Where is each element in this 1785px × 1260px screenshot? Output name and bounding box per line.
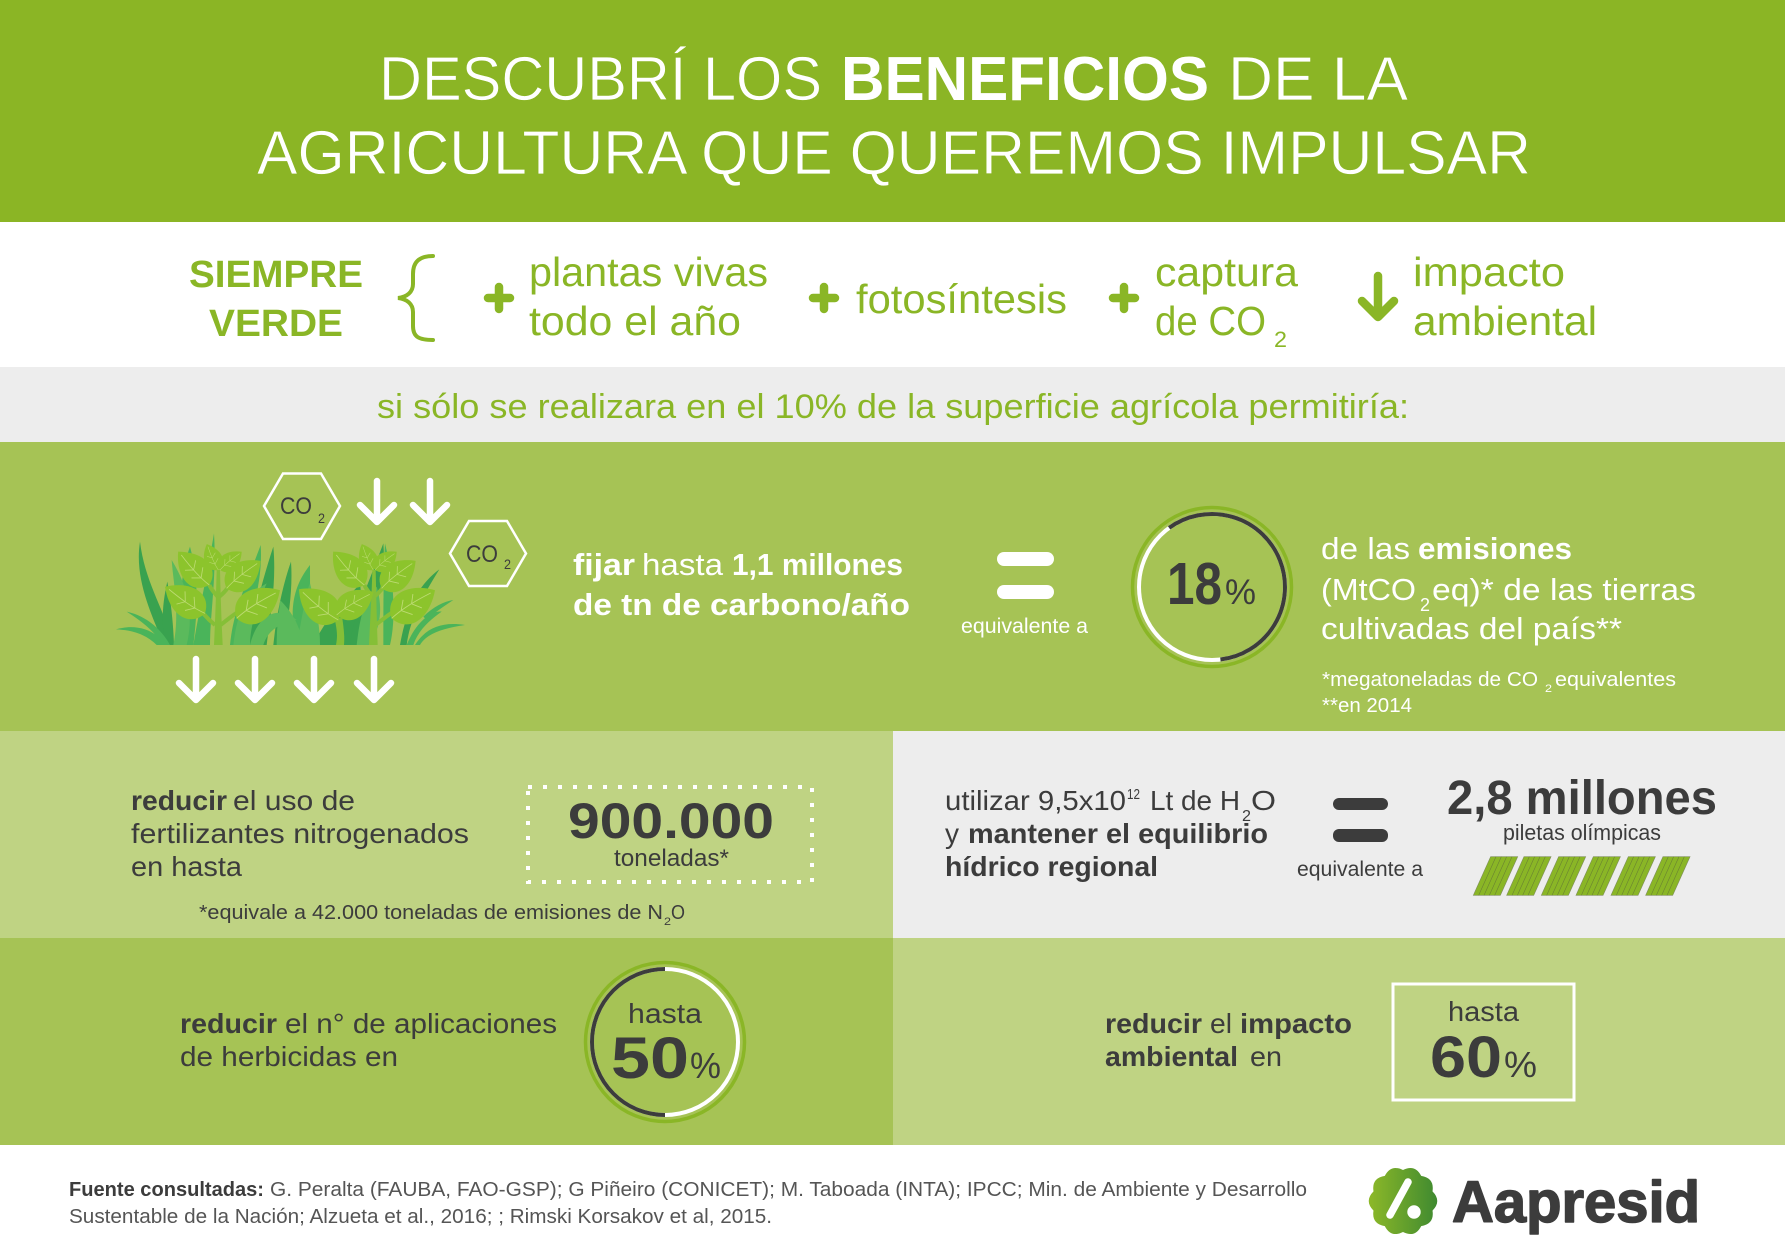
title: DE LA	[1228, 45, 1409, 114]
text: emisiones: emisiones	[1418, 531, 1572, 566]
footnote: N2O: O	[671, 902, 685, 924]
text: plantas vivas: todo el año	[529, 298, 741, 344]
text: captura de CO2: de CO	[1155, 298, 1266, 344]
panel: subtitle band	[0, 367, 1785, 442]
text: reducir impacto	[1105, 1008, 1352, 1072]
icon: CO2 hexagon	[264, 474, 340, 539]
text: fijar carbono: hasta	[642, 547, 724, 582]
callout: 60 percent box: %	[1504, 1044, 1537, 1085]
icon: equals white	[997, 552, 1054, 599]
footnote: N2O: *equivale a 42.000 toneladas de emisiones de N	[199, 902, 663, 924]
text: reducir herbicidas: reducir	[180, 1008, 277, 1039]
text: reducir impacto: el	[1210, 1008, 1232, 1039]
icon: plus	[1113, 287, 1135, 309]
text: emisiones: de las	[1321, 531, 1410, 566]
panel: siempre verde	[0, 222, 1785, 367]
icon: plus	[488, 287, 510, 309]
text: utilizar agua: mantener el equilibrio	[968, 818, 1268, 849]
text: utilizar agua: O	[1251, 785, 1276, 816]
text: reducir fertilizantes: en hasta	[131, 851, 242, 882]
text: utilizar agua: y	[945, 818, 959, 849]
footnote: megatoneladas: 2	[1545, 683, 1552, 695]
footer: sources: G. Peralta (FAUBA, FAO-GSP); G Piñeiro (CONICET); M. Taboada (INTA); IPCC; Min. de Ambiente y Desarrollo	[270, 1179, 1307, 1201]
icon: CO2 hexagon: 2	[318, 510, 325, 526]
text: utilizar agua: 2	[1242, 808, 1251, 825]
text: utilizar agua: 12	[1127, 786, 1140, 803]
title: AGRICULTURA QUE QUEREMOS IMPULSAR	[257, 119, 1531, 188]
footnote: megatoneladas: *megatoneladas de CO	[1322, 669, 1538, 691]
text: reducir fertilizantes: el uso de	[233, 785, 355, 816]
stat: 2,8 millones: 2,8 millones	[1447, 772, 1717, 825]
text: captura de CO2: captura	[1155, 249, 1298, 295]
footnote: megatoneladas	[1322, 669, 1676, 717]
title: BENEFICIOS	[841, 45, 1209, 114]
icon: arrows into soil	[179, 659, 391, 700]
heading: siempre verde	[189, 254, 363, 345]
icon: equals dark	[1333, 798, 1388, 842]
callout: 60 percent box: 60	[1430, 1025, 1502, 1090]
text: reducir herbicidas: de herbicidas en	[180, 1041, 398, 1072]
title	[257, 45, 1531, 188]
text: reducir impacto: en	[1250, 1041, 1282, 1072]
icon: curly brace	[398, 256, 433, 340]
chart: 50 percent ring	[586, 962, 744, 1122]
footer: sources: Fuente consultadas:	[69, 1179, 264, 1201]
icon: CO2 hexagon: 2	[504, 556, 511, 572]
panel: herbicides	[0, 938, 893, 1145]
text: utilizar agua: utilizar 9,5x10	[945, 785, 1126, 816]
text: utilizar agua	[945, 785, 1276, 882]
callout: 60 percent box: hasta	[1448, 996, 1519, 1027]
panel: environmental impact	[893, 938, 1785, 1145]
text: reducir fertilizantes	[131, 785, 469, 882]
icon: CO2 hexagon	[450, 521, 526, 586]
text: emisiones: cultivadas del país**	[1321, 611, 1622, 646]
panel: carbon capture	[0, 442, 1785, 731]
text: reducir herbicidas	[180, 1008, 557, 1072]
chart: 50 percent ring: %	[690, 1045, 721, 1086]
callout: 900.000 toneladas	[528, 787, 812, 882]
panel: fertilizers	[0, 731, 893, 938]
label: equivalente a: equivalente a	[1297, 858, 1423, 881]
text: reducir herbicidas: el n° de aplicaciones	[285, 1008, 557, 1039]
text: fijar carbono: 1,1 millones	[732, 547, 903, 582]
text: reducir impacto: reducir	[1105, 1008, 1202, 1039]
icon: CO2 hexagon: CO	[280, 493, 312, 520]
icon: plants	[116, 533, 465, 645]
text: utilizar agua: Lt de H	[1150, 785, 1240, 816]
icon: CO2 hexagon: CO	[466, 541, 498, 568]
footer: sources: Sustentable de la Nación; Alzueta et al., 2016; ; Rimski Korsakov et al, 2015.	[69, 1206, 772, 1228]
callout: 60 percent box	[1393, 984, 1574, 1100]
icon: plus	[813, 287, 835, 309]
icon: arrows into plants	[360, 481, 447, 522]
icon: logo badge	[1369, 1168, 1437, 1234]
text: fijar carbono	[573, 547, 910, 622]
title: DESCUBRÍ LOS	[379, 45, 822, 114]
stat: 2,8 millones: piletas olímpicas	[1503, 820, 1661, 845]
text: impacto ambiental: impacto	[1413, 249, 1565, 295]
label: equivalente a: equivalente a	[961, 615, 1088, 638]
text: fijar carbono: de tn de carbono/año	[573, 587, 910, 622]
text: reducir impacto: impacto	[1240, 1008, 1352, 1039]
text: captura de CO2	[1155, 249, 1298, 352]
heading: siempre verde: SIEMPRE	[189, 254, 363, 296]
subtitle: si sólo se realizara en el 10% de la superficie agrícola permitiría:	[377, 388, 1409, 426]
text: plantas vivas: plantas vivas	[529, 249, 768, 295]
footer: sources	[69, 1179, 1307, 1228]
icon: arrow down	[1362, 276, 1394, 317]
footnote: megatoneladas: **en 2014	[1322, 695, 1412, 717]
icon: olympic pools	[1473, 857, 1690, 895]
text: reducir fertilizantes: fertilizantes nitrogenados	[131, 818, 469, 849]
heading: siempre verde: VERDE	[209, 303, 343, 345]
text: impacto ambiental: ambiental	[1413, 298, 1597, 344]
text: fijar carbono: fijar	[573, 547, 635, 582]
panel: water	[893, 731, 1785, 938]
chart: 18 percent ring: %	[1225, 573, 1256, 612]
chart: 50 percent ring: hasta	[628, 998, 702, 1029]
text: utilizar agua: hídrico regional	[945, 851, 1158, 882]
text: reducir impacto: ambiental	[1105, 1041, 1238, 1072]
panel: title header	[0, 0, 1785, 222]
text: plantas vivas	[529, 249, 768, 344]
chart: 50 percent ring: 50	[611, 1026, 689, 1091]
text: reducir fertilizantes: reducir	[131, 785, 227, 816]
text: captura de CO2: 2	[1274, 327, 1287, 352]
footnote: N2O: 2	[664, 916, 671, 928]
chart: 18 percent ring	[1132, 508, 1292, 666]
text: emisiones: (MtCO	[1321, 572, 1416, 607]
chart: 18 percent ring: 18	[1167, 551, 1222, 617]
text: emisiones: 2	[1420, 595, 1430, 615]
text: fotosíntesis: fotosíntesis	[856, 276, 1067, 322]
text: impacto ambiental	[1413, 249, 1597, 344]
logo: Aapresid	[1369, 1168, 1700, 1235]
footnote: megatoneladas: equivalentes	[1555, 669, 1676, 691]
callout: 900.000 toneladas: 900.000	[568, 793, 774, 849]
wordmark: Aapresid	[1452, 1170, 1700, 1235]
text: emisiones	[1321, 531, 1696, 646]
callout: 900.000 toneladas: toneladas*	[614, 845, 729, 872]
illustration: plants with CO2	[116, 474, 526, 700]
text: emisiones: eq)* de las tierras	[1432, 572, 1696, 607]
